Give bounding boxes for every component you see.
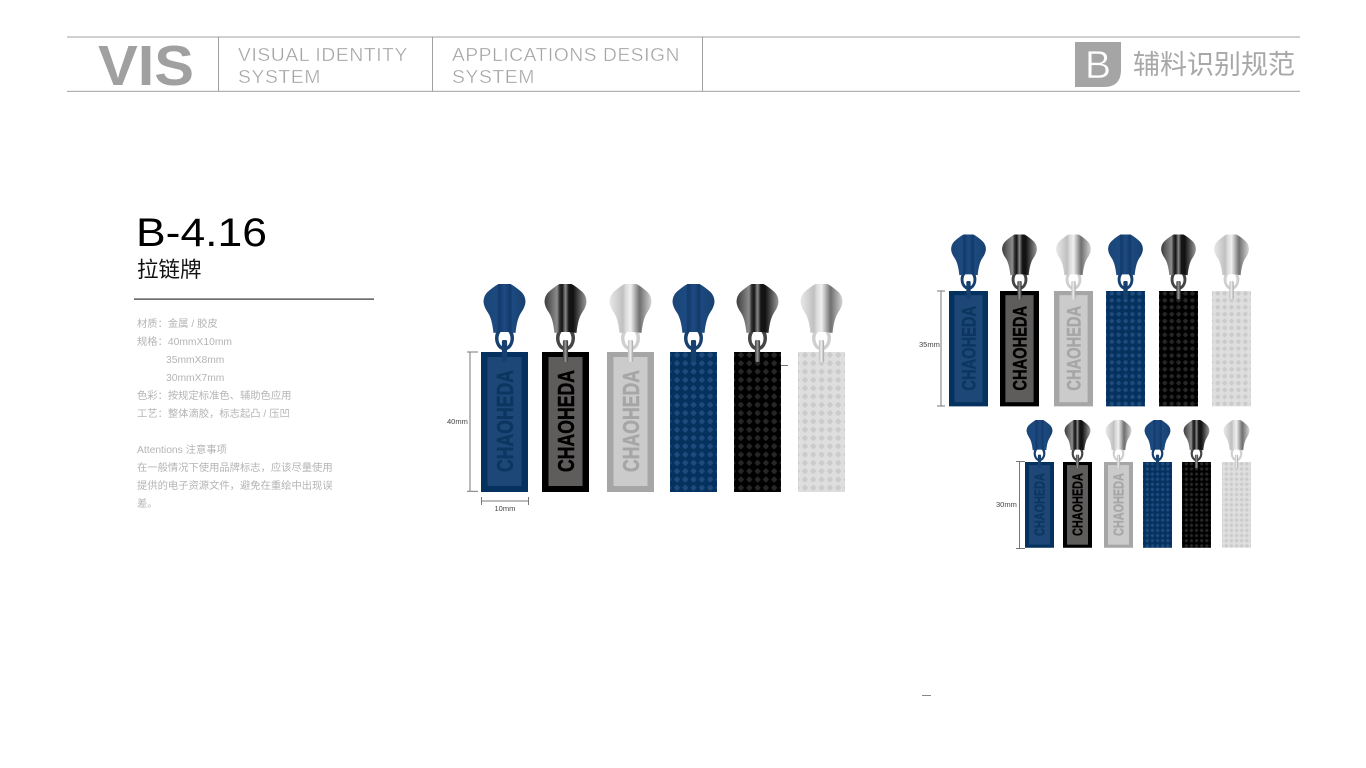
- zipper pull: black logo: [542, 284, 589, 492]
- text block: specifications: 规格：40mmX10mm: [137, 335, 232, 348]
- visual identity system label: VISUAL IDENTITY: [238, 45, 408, 65]
- zipper pull: navy logo: [949, 235, 988, 406]
- zipper pull: black logo: [1063, 420, 1092, 548]
- dimension: 40mm height: [446, 352, 478, 492]
- zipper pull: black logo: [1000, 235, 1039, 406]
- text block: specifications: 色彩：按规定标准色、辅助色应用: [137, 389, 291, 402]
- zipper pull: black pattern: [1159, 235, 1198, 406]
- title: item number: B-4.16: [136, 211, 267, 255]
- zipper pull: grey logo: [607, 284, 654, 492]
- zipper pulls: 35mm set: [949, 235, 1251, 406]
- applications design system label: SYSTEM: [452, 67, 535, 87]
- text block: attentions: 差。: [137, 497, 158, 510]
- zipper pull: navy logo: CHAOHEDA: [492, 370, 518, 472]
- zipper pull: grey logo: CHAOHEDA: [1064, 306, 1086, 391]
- page header bar: [67, 34, 1300, 98]
- zipper pull: light pattern: [1212, 235, 1251, 406]
- dimension: 30mm height: [995, 461, 1025, 549]
- zipper pull: grey logo: [1104, 420, 1133, 548]
- zipper pull: light pattern: [798, 284, 845, 492]
- zipper pull: navy logo: [1025, 420, 1054, 548]
- zipper pulls: 40mm set: [481, 284, 845, 492]
- VIS wordmark: VIS: [98, 34, 194, 98]
- dimension: 10mm width: 10mm: [494, 504, 515, 513]
- section title: 辅料识别规范: [1133, 50, 1295, 80]
- zipper pull: light pattern: [1222, 420, 1251, 548]
- applications design system label: APPLICATIONS DESIGN: [452, 45, 680, 65]
- text block: specifications: [137, 317, 291, 420]
- zipper pull: navy pattern: [670, 284, 717, 492]
- zipper pull: navy pattern: [1106, 235, 1145, 406]
- text block: attentions: [137, 443, 333, 510]
- dimension: 30mm height: 30mm: [996, 500, 1017, 509]
- text block: specifications: 35mmX8mm: [166, 355, 224, 366]
- section badge B: B: [1085, 44, 1111, 87]
- visual identity system label: [238, 45, 408, 87]
- dimension: 40mm height: 40mm: [447, 417, 468, 426]
- zipper pull: black logo: CHAOHEDA: [553, 370, 579, 472]
- zipper pull: grey logo: CHAOHEDA: [1112, 473, 1128, 536]
- zipper pull: black pattern: [734, 284, 781, 492]
- applications design system label: [452, 45, 680, 87]
- text block: attentions: 在一般情况下使用品牌标志，应该尽量使用: [137, 461, 333, 474]
- visual identity system label: SYSTEM: [238, 67, 321, 87]
- zipper pull: navy logo: CHAOHEDA: [1033, 473, 1049, 536]
- zipper pulls: 30mm set: [1025, 420, 1251, 548]
- zipper pull: navy logo: [481, 284, 528, 492]
- text block: attentions: 提供的电子资源文件，避免在重绘中出现误: [137, 479, 333, 492]
- dimension: 35mm height: 35mm: [919, 340, 940, 349]
- subtitle: zipper pull: 拉链牌: [137, 258, 202, 282]
- zipper pull: grey logo: [1054, 235, 1093, 406]
- dimension: 10mm width: [481, 497, 529, 513]
- section badge B: [1075, 42, 1121, 87]
- text block: specifications: 工艺：整体滴胶，标志起凸 / 压凹: [137, 407, 290, 420]
- zipper pull: navy logo: CHAOHEDA: [959, 306, 981, 391]
- text block: specifications: 30mmX7mm: [166, 373, 224, 384]
- text block: attentions: Attentions 注意事项: [137, 443, 227, 456]
- zipper pull: navy pattern: [1143, 420, 1172, 548]
- zipper pull: grey logo: CHAOHEDA: [618, 370, 644, 472]
- zipper pull: black logo: CHAOHEDA: [1010, 306, 1032, 391]
- text block: specifications: 材质：金属 / 胶皮: [137, 317, 218, 330]
- zipper pull: black logo: CHAOHEDA: [1071, 473, 1087, 536]
- dimension: 35mm height: [918, 290, 945, 406]
- zipper pull: black pattern: [1182, 420, 1211, 548]
